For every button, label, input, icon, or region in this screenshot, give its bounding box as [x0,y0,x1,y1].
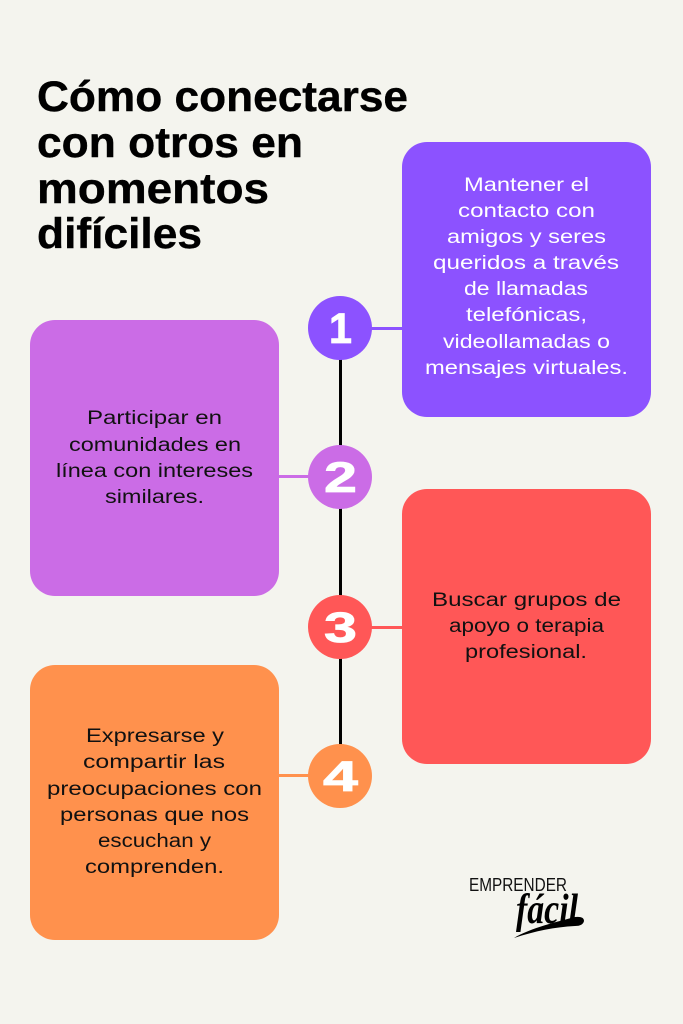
panel 1: keep in touch: contacto con [458,201,595,222]
panel 1: keep in touch: de llamadas [464,279,588,300]
step 1 badge [308,296,372,360]
panel 2: online communities [30,320,279,596]
panel 1: keep in touch: Mantener el [464,175,589,196]
panel 2: online communities: similares. [105,487,204,508]
connector 1 [340,327,410,330]
step 1 badge: 1 [329,305,352,353]
title: momentos [37,165,269,213]
title: con otros en [37,119,303,167]
panel 1: keep in touch: queridos a través [433,253,619,274]
panel 4: express yourself: personas que nos [60,805,249,826]
step 3 badge [308,595,372,659]
title [37,73,408,258]
step 2 badge [308,445,372,509]
timeline line [339,328,342,776]
panel 1: keep in touch [402,142,651,417]
step 2 badge: 2 [324,454,357,502]
panel 1: keep in touch: mensajes virtuales. [425,358,628,379]
panel 2: online communities: Participar en [87,408,222,429]
connector 2 [270,475,340,478]
panel 4: express yourself: compartir las [83,752,225,773]
step 4 badge [308,744,372,808]
connector 3 [340,626,410,629]
panel 3: support groups: profesional. [465,642,587,663]
logo: Emprender Fácil [469,875,584,938]
panel 3: support groups: Buscar grupos de [432,590,621,611]
logo: Emprender Fácil: fácil [516,887,578,933]
panel 2: online communities: comunidades en [69,435,241,456]
panel 1: keep in touch: telefónicas, [466,305,587,326]
panel 3: support groups [402,489,651,764]
connector 4 [270,774,340,777]
panel 4: express yourself: escuchan y [98,831,212,852]
panel 3: support groups: apoyo o terapia [449,616,604,637]
panel 4: express yourself: Expresarse y [86,726,225,747]
panel 4: express yourself: comprenden. [85,857,224,878]
panel 2: online communities: línea con intereses [56,461,253,482]
step 4 badge: 4 [323,753,358,801]
logo: Emprender Fácil: EMPRENDER [469,875,567,895]
panel 1: keep in touch: videollamadas o [443,332,610,353]
title: Cómo conectarse [37,73,408,121]
step 3 badge: 3 [324,604,357,652]
panel 4: express yourself: preocupaciones con [47,779,262,800]
panel 1: keep in touch: amigos y seres [447,227,606,248]
title: difíciles [37,210,202,258]
panel 4: express yourself [30,665,279,940]
